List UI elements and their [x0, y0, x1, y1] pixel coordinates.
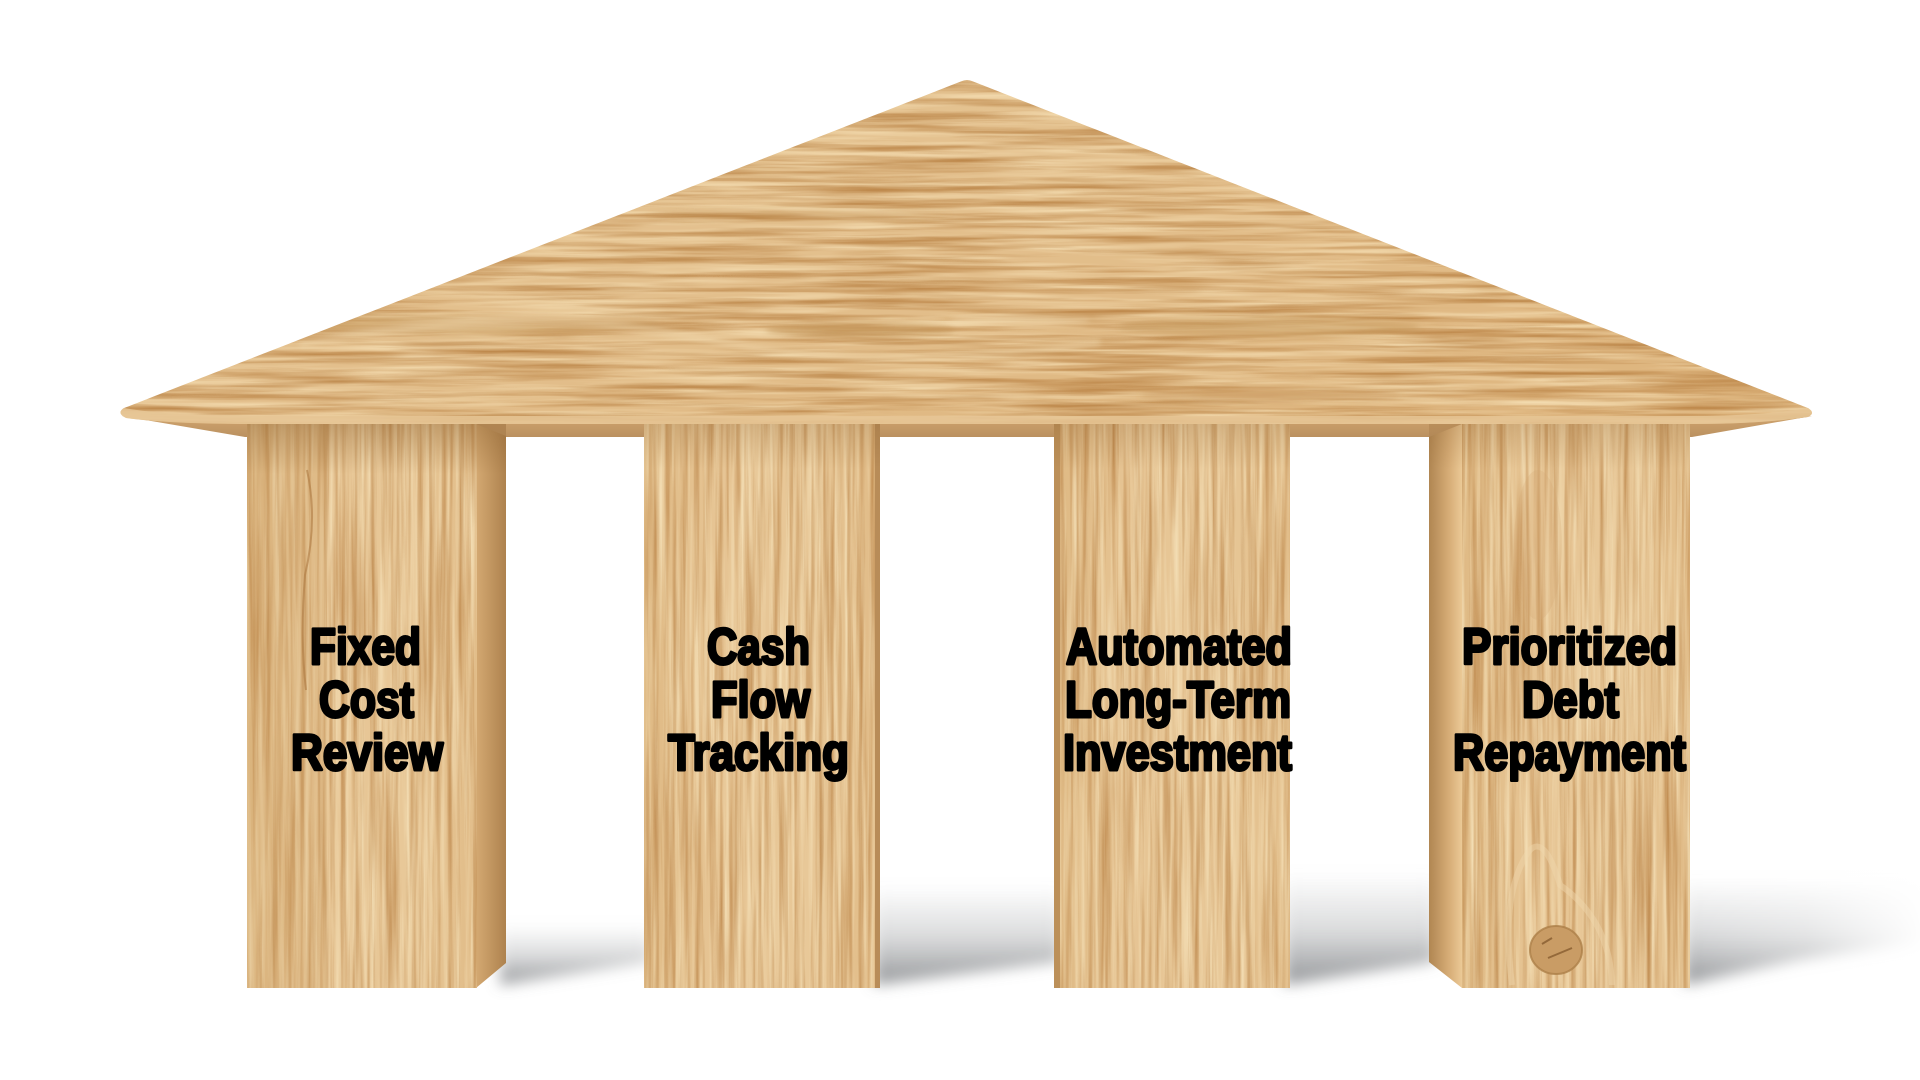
pillar 2 face — [644, 424, 875, 988]
pillar 2 label: Cash — [707, 618, 810, 675]
pillar 2: Cash Flow Tracking — [644, 424, 880, 988]
floor shadows — [500, 860, 1920, 990]
pillar 1 label — [291, 618, 443, 781]
pillar 4 label: Repayment — [1453, 724, 1686, 781]
pillar 2 label: Tracking — [668, 724, 849, 781]
pillar 1 face — [247, 424, 477, 988]
pillar 3 label: Automated — [1066, 618, 1292, 675]
pillar 4 label: Debt — [1522, 671, 1619, 728]
roof underside — [122, 416, 1812, 437]
pillar 3 side — [1054, 424, 1061, 988]
roof wood swirls — [280, 210, 1420, 401]
pillar 3: Automated Long-Term Investment — [1054, 424, 1292, 988]
cathedral grain — [1514, 470, 1562, 620]
pillar 2 label — [668, 618, 849, 781]
pillar 1 crack — [303, 470, 312, 690]
pillar 1 label: Review — [291, 724, 443, 781]
pillar 3 label: Long-Term — [1065, 671, 1291, 728]
pillar 2 label: Flow — [711, 671, 810, 728]
wood knot — [1509, 847, 1612, 985]
four-pillar wooden temple diagram — [120, 80, 1892, 993]
pillar 3 label: Investment — [1063, 724, 1292, 781]
pillar 3 label — [1063, 618, 1292, 781]
roof front bullnose — [120, 408, 1812, 424]
roof — [120, 80, 1812, 437]
pillar 1: Fixed Cost Review — [247, 424, 506, 988]
pillar 4: Prioritized Debt Repayment — [1429, 424, 1690, 988]
pillar 2 side — [874, 424, 880, 988]
pillar 1 side — [476, 424, 506, 988]
pillar 1 label: Cost — [319, 671, 414, 728]
pillar 4 side — [1429, 424, 1462, 988]
roof top face with horizontal grain — [120, 80, 1812, 424]
pillar 1 label: Fixed — [310, 618, 421, 675]
pillar 4 label — [1453, 618, 1686, 781]
pillar 3 face — [1060, 424, 1290, 988]
pillar 4 face — [1462, 424, 1690, 988]
pillar 4 label: Prioritized — [1462, 618, 1677, 675]
